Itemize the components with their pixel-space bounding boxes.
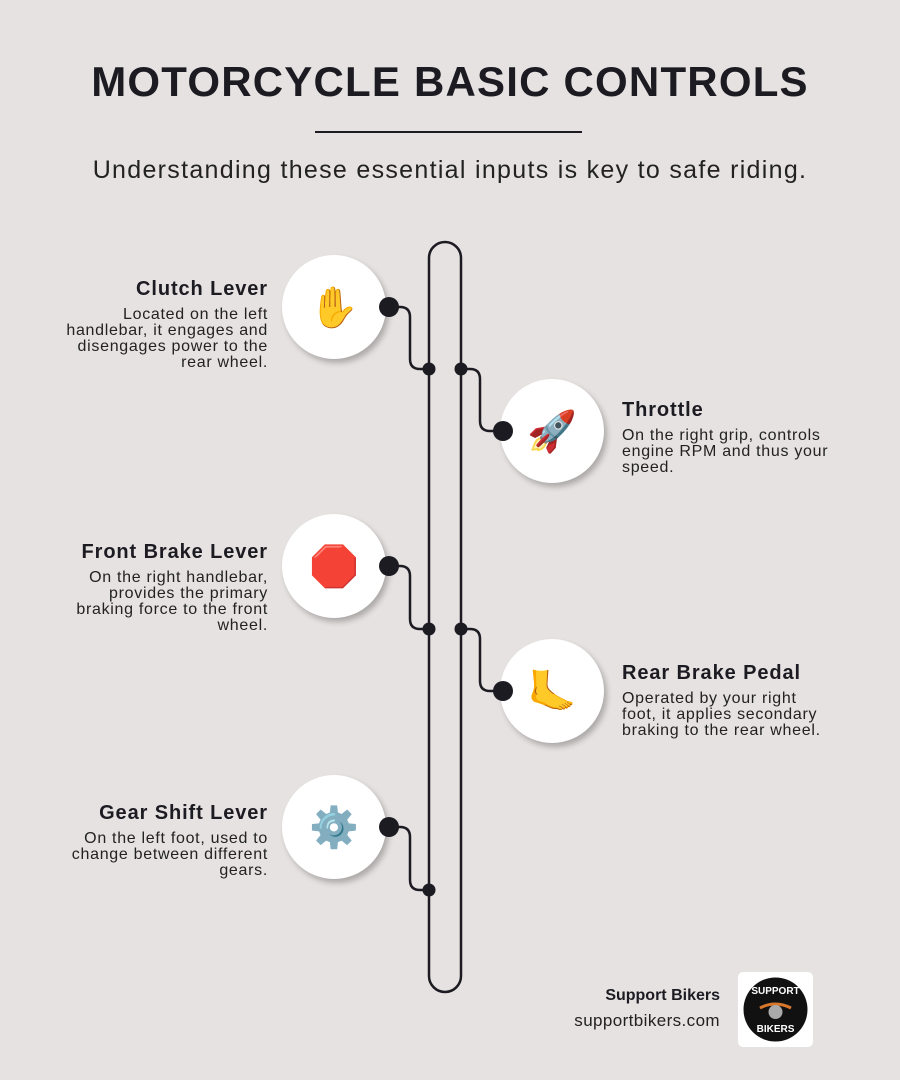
text: clutch: disengages power to the: [78, 338, 268, 355]
icon: hand: ✋: [309, 284, 359, 330]
text: gear shift: On the left foot, used to: [84, 830, 268, 847]
logo: [738, 972, 813, 1047]
text: rear brake: [622, 662, 821, 739]
text: rear brake: braking to the rear wheel.: [622, 722, 821, 739]
footer brand text: supportbikers.com: [574, 1011, 720, 1030]
text: clutch: rear wheel.: [181, 354, 268, 371]
text: rear brake: Rear Brake Pedal: [622, 662, 801, 684]
icon: rocket: 🚀: [527, 408, 577, 454]
text: gear shift: [72, 802, 268, 879]
icon: gear: ⚙️: [309, 804, 359, 850]
text: throttle: engine RPM and thus your: [622, 443, 828, 460]
text: front brake: braking force to the front: [76, 601, 268, 618]
icon: rocket: [500, 379, 604, 483]
text: throttle: Throttle: [622, 399, 704, 421]
text: clutch: handlebar, it engages and: [66, 322, 268, 339]
footer brand text: [574, 987, 720, 1030]
logo: BIKERS: [757, 1024, 795, 1035]
text: gear shift: Gear Shift Lever: [99, 802, 268, 824]
text: front brake: wheel.: [218, 617, 268, 634]
title: MOTORCYCLE BASIC CONTROLS: [91, 58, 809, 105]
subtitle: Understanding these essential inputs is key to safe riding.: [93, 156, 807, 184]
text: clutch: [66, 278, 268, 371]
text: throttle: speed.: [622, 459, 674, 476]
text: clutch: Clutch Lever: [136, 278, 268, 300]
icon: foot: [500, 639, 604, 743]
text: throttle: [622, 399, 828, 476]
icon: hand: [282, 255, 386, 359]
text: gear shift: change between different: [72, 846, 268, 863]
footer brand text: Support Bikers: [605, 987, 720, 1004]
icon: stop sign: 🛑: [309, 542, 359, 590]
text: front brake: provides the primary: [109, 585, 268, 602]
icon: gear: [282, 775, 386, 879]
divider: [315, 131, 582, 133]
text: front brake: [76, 541, 268, 634]
text: front brake: Front Brake Lever: [82, 541, 268, 563]
text: clutch: Located on the left: [123, 306, 268, 323]
text: throttle: On the right grip, controls: [622, 427, 821, 444]
text: front brake: On the right handlebar,: [89, 569, 268, 586]
icon: foot: 🦶: [527, 668, 577, 714]
text: rear brake: Operated by your right: [622, 690, 797, 707]
logo: SUPPORT: [751, 986, 800, 997]
text: rear brake: foot, it applies secondary: [622, 706, 817, 723]
text: gear shift: gears.: [219, 862, 268, 879]
icon: stop sign: [282, 514, 386, 618]
